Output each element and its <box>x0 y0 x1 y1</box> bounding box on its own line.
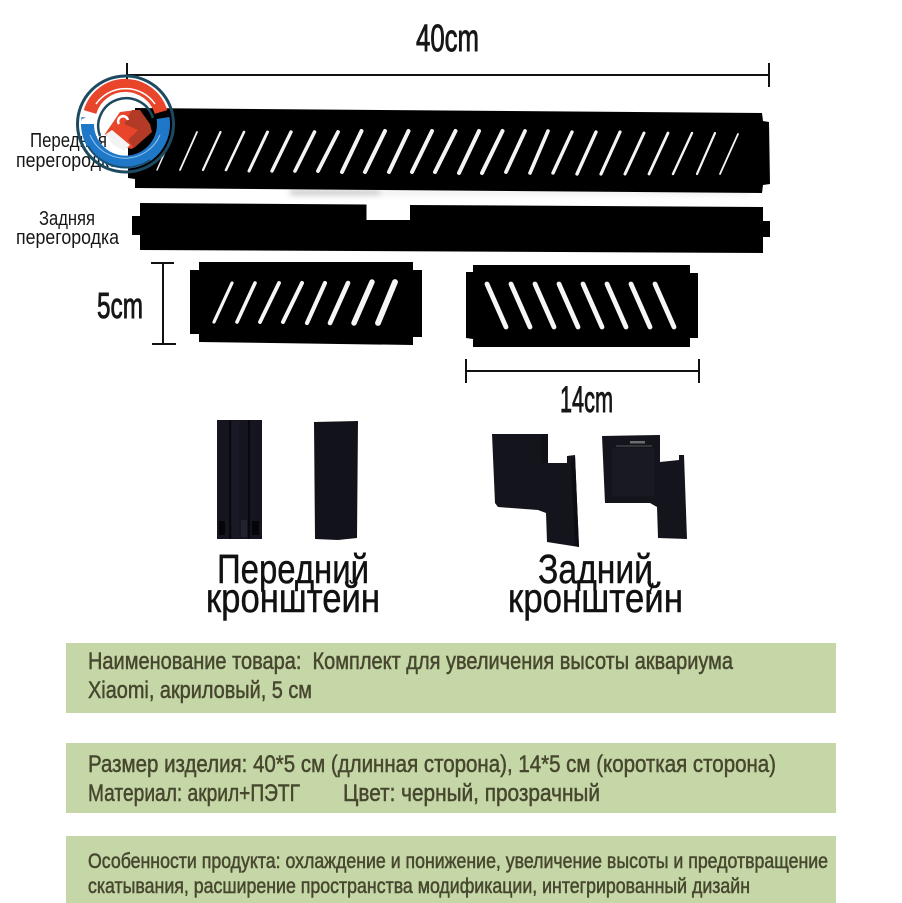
label: front partition: Передняя <box>30 130 107 152</box>
caption: front bracket: Передний <box>217 546 369 592</box>
label: back partition: Задняя <box>39 208 95 230</box>
soft shadow under front partition <box>290 190 750 195</box>
slots of short front panel <box>214 282 395 323</box>
dimension: 5cm: 5cm <box>97 285 143 326</box>
slots of front partition <box>157 131 738 174</box>
dimension: 40cm: 40cm <box>416 18 479 60</box>
logo: handshake emblem <box>78 76 174 172</box>
info panel: product features: скатывания, расширение пространства модификации, интегрированный дизайн <box>88 875 750 898</box>
front bracket, flat view <box>314 421 358 540</box>
label: back partition: перегородка <box>16 227 120 249</box>
dimension: 40cm <box>127 18 769 87</box>
back long partition <box>132 203 770 253</box>
caption: back bracket: Задний <box>538 546 653 592</box>
label: front partition: перегородка <box>16 150 120 172</box>
caption: back bracket: кронштейн <box>508 575 683 621</box>
short front panel <box>190 262 422 345</box>
handshake <box>105 110 152 151</box>
front long partition <box>128 108 770 193</box>
info panel: size, material, colour: Материал: акрил+ПЭТГ <box>88 780 300 807</box>
info panel: product name: Xiaomi, акриловый, 5 см <box>88 677 312 704</box>
label: back partition <box>16 208 120 249</box>
info panel: size, material, colour: Цвет: черный, прозрачный <box>343 780 600 807</box>
short back panel <box>466 265 698 347</box>
dimension: 5cm <box>97 263 176 344</box>
info panel: product features <box>66 836 836 903</box>
front bracket, ridged view <box>217 420 262 539</box>
dimension: 14cm: 14cm <box>560 379 613 420</box>
info panel: product name <box>66 643 836 713</box>
caption: front bracket <box>206 546 380 621</box>
dimension: 14cm <box>466 359 699 420</box>
caption: back bracket <box>508 546 683 621</box>
info panel: product name: Наименование товара: Комплект для увеличения высоты аквариума <box>88 648 734 675</box>
info panel: size, material, colour <box>66 743 836 813</box>
back bracket, left piece <box>492 434 579 547</box>
back bracket, right piece <box>602 435 687 539</box>
info panel: size, material, colour: Размер изделия: 40*5 см (длинная сторона), 14*5 см (короткая сторона) <box>88 751 776 778</box>
label: front partition <box>16 130 120 172</box>
caption: front bracket: кронштейн <box>206 575 380 621</box>
slots of short back panel <box>487 284 674 327</box>
